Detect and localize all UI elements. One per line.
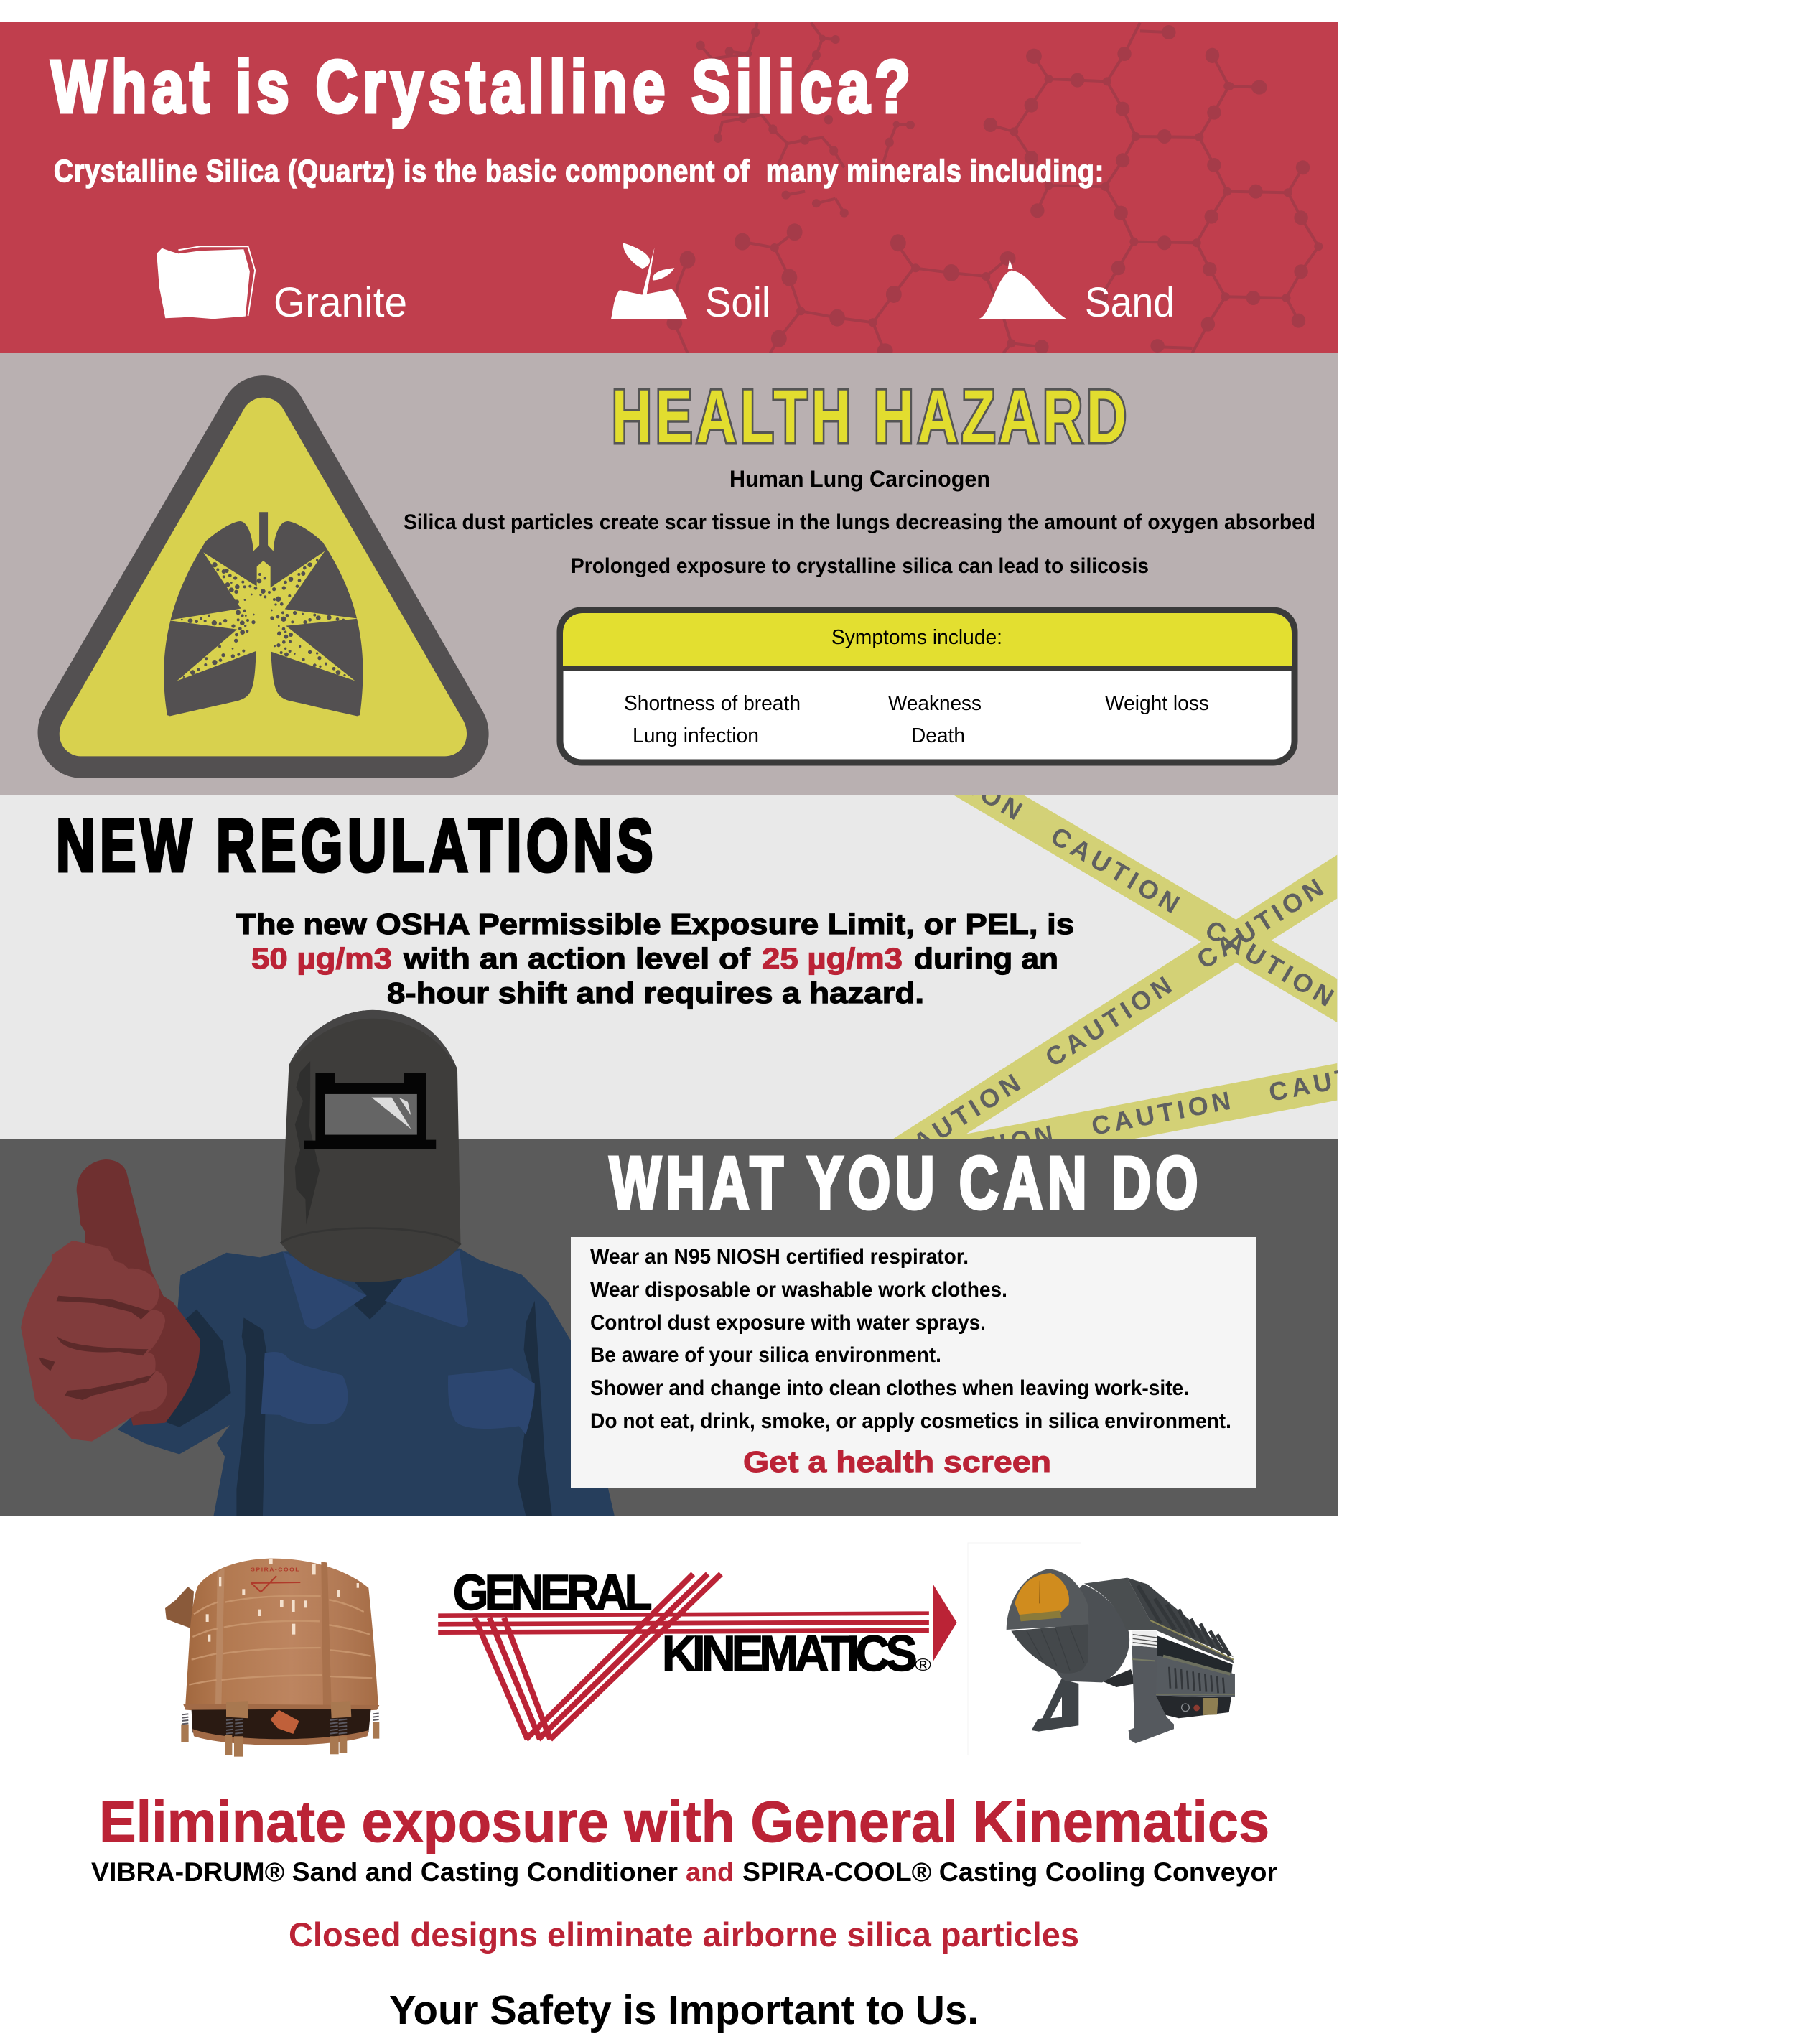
photo: vibra-drum (165, 1559, 379, 1757)
heading: new regulations: NEW REGULATIONS (56, 804, 658, 887)
caution tapes: CAUTION (912, 1119, 1055, 1175)
caution tapes: CAUTION (889, 727, 1027, 826)
product line: SPIRA-COOL® Casting Cooling Conveyor (742, 1857, 1277, 1887)
drum lettering: SPIRA-COOL (251, 1567, 300, 1573)
caution tapes: CAUTION (1200, 914, 1339, 1012)
symptoms list: Weakness (888, 692, 982, 715)
callout: get a health screen: Get a health screen (743, 1445, 1051, 1478)
caution tapes: CAUTION (1040, 970, 1177, 1073)
logo wordmark: kinematics: KINEMATICS (662, 1625, 915, 1681)
regulation text: 25 µg/m3 (762, 942, 903, 975)
symptoms list (624, 692, 1209, 747)
label: granite: Granite (274, 279, 407, 326)
action list: Control dust exposure with water sprays. (590, 1311, 986, 1335)
caution tapes: CAUTION (1046, 821, 1185, 919)
panel: what you can do (0, 1010, 1338, 1516)
icon: sand pile (979, 260, 1066, 319)
symptoms list: Weight loss (1105, 692, 1209, 715)
action list: Do not eat, drink, smoke, or apply cosmetics in silica environment. (590, 1409, 1231, 1433)
regulation text: 8-hour shift and requires a hazard. (387, 976, 924, 1009)
registered mark: ® (915, 1656, 931, 1675)
panel: closing message (91, 1790, 1277, 2033)
heading: eliminate exposure: Eliminate exposure with General Kinematics (99, 1790, 1269, 1854)
thumbs up hand (77, 1159, 200, 1425)
caution tapes: CAUTION (1089, 1086, 1233, 1141)
text: human lung carcinogen: Human Lung Carcinogen (729, 466, 990, 492)
label: sand: Sand (1085, 279, 1175, 326)
label: soil: Soil (705, 279, 770, 326)
caution tapes (893, 795, 1338, 1139)
molecule hexagon pattern (666, 23, 1323, 358)
action list (590, 1245, 1231, 1433)
worker body (118, 1249, 615, 1516)
product line: and (686, 1857, 734, 1887)
caution tapes: CAUTION (888, 1068, 1025, 1170)
drum lettering (251, 1567, 300, 1592)
subtitle: Crystalline Silica (Quartz) is the basic component of many minerals including: (54, 154, 1104, 189)
text: closed designs: Closed designs eliminate airborne silica particles (289, 1915, 1079, 1954)
illustration: welder giving thumbs up (21, 1010, 615, 1516)
action list: Wear an N95 NIOSH certified respirator. (590, 1245, 969, 1269)
icon: soil with sprout (611, 243, 688, 319)
action list: Wear disposable or washable work clothes. (590, 1278, 1007, 1302)
caution tapes: CAUTION (1267, 1052, 1410, 1107)
caution tapes: CAUTION (1191, 872, 1328, 975)
panel: new regulations (0, 795, 1338, 1139)
action list: Be aware of your silica environment. (590, 1343, 941, 1367)
panel: products and logo (165, 1543, 1235, 1757)
action list box (571, 1237, 1256, 1488)
symptoms box (560, 610, 1295, 762)
title: What is Crystalline Silica? (51, 45, 915, 128)
heading: what you can do: WHAT YOU CAN DO (610, 1142, 1203, 1224)
regulation text: 50 µg/m3 (251, 942, 392, 975)
logo wordmark: general: GENERAL (453, 1564, 651, 1620)
symptoms list: Lung infection (633, 724, 759, 747)
regulation text: during an (914, 942, 1058, 975)
icon: granite rock (157, 246, 255, 319)
product line (91, 1857, 1277, 1887)
photo: spira-cool conveyor (968, 1543, 1235, 1755)
welding helmet (281, 1010, 460, 1282)
text: scar tissue: Silica dust particles create scar tissue in the lungs decreasing the amount of oxygen absorbed (404, 510, 1315, 534)
regulation text: with an action level of (403, 942, 750, 975)
panel: what is crystalline silica (0, 22, 1338, 358)
logo: general kinematics (438, 1564, 957, 1740)
text: silicosis: Prolonged exposure to crystalline silica can lead to silicosis (571, 554, 1149, 578)
heading: health hazard: HEALTH HAZARD (612, 375, 1130, 459)
icon: warning triangle with lungs (38, 375, 489, 778)
symptoms list: Death (911, 724, 965, 747)
symptoms heading: Symptoms include: (831, 626, 1002, 649)
text: your safety: Your Safety is Important to Us. (389, 1987, 979, 2033)
symptoms list: Shortness of breath (624, 692, 801, 715)
product line: VIBRA-DRUM® Sand and Casting Conditioner (91, 1857, 678, 1887)
regulation text (236, 907, 1074, 1009)
caution tapes: CAUTION (1343, 775, 1480, 877)
action list: Shower and change into clean clothes when leaving work-site. (590, 1376, 1189, 1400)
regulation text: The new OSHA Permissible Exposure Limit, or PEL, is (236, 907, 1074, 941)
panel: health hazard (0, 353, 1338, 795)
